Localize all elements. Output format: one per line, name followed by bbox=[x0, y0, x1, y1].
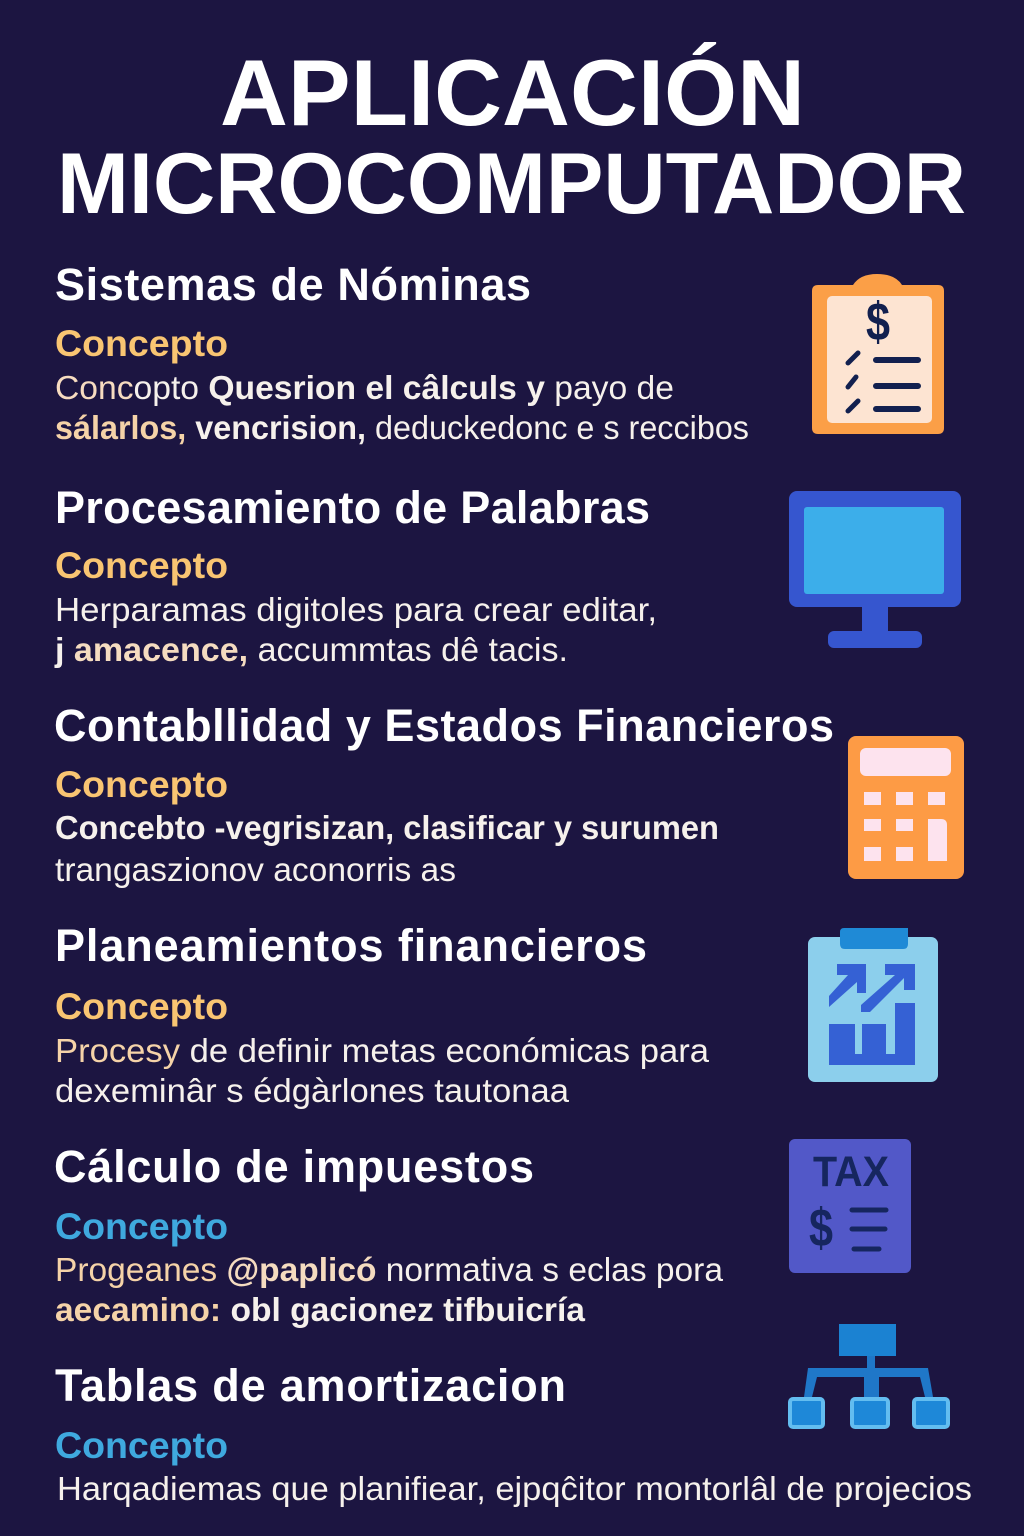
subheading: Concepto: Concepto bbox=[55, 986, 228, 1027]
panel: Planeamientos financieros bbox=[55, 920, 938, 1110]
icon: tax document: TAX bbox=[813, 1148, 889, 1196]
panel: Contabilidad y Estados Financieros bbox=[54, 700, 964, 889]
text block: contabilidad description: trangaszionov aconorris as bbox=[55, 852, 456, 889]
subheading: Concepto: Concepto bbox=[55, 545, 228, 586]
heading: Cálculo de impuestos: Cálculo de impuestos bbox=[54, 1141, 534, 1192]
text block: nóminas description bbox=[55, 370, 749, 447]
icon: payroll clipboard bbox=[812, 274, 944, 434]
icon: financial chart clipboard bbox=[808, 928, 938, 1082]
text block: planeamientos description: Procesy de definir metas económicas para bbox=[55, 1033, 709, 1070]
subheading: Concepto: Concepto bbox=[55, 323, 228, 364]
subheading: Concepto: Concepto bbox=[55, 1206, 228, 1247]
icon: hierarchy diagram bbox=[790, 1324, 948, 1427]
heading: Procesamiento de Palabras: Procesamiento de Palabras bbox=[55, 482, 650, 533]
heading: Sistemas de Nóminas: Sistemas de Nóminas bbox=[55, 259, 531, 310]
title: MICROCOMPUTADOR bbox=[57, 136, 966, 232]
text block: planeamientos description bbox=[55, 1033, 709, 1110]
icon: tax document bbox=[789, 1139, 911, 1273]
text block: nóminas description: sálarlos, vencrision, deduckedonc e s reccibos bbox=[55, 410, 749, 447]
panel: Tablas de amortizacion bbox=[55, 1324, 972, 1508]
subheading: Concepto: Concepto bbox=[55, 1425, 228, 1466]
title: APLICACIÓN bbox=[220, 40, 805, 145]
panel: Procesamiento de Palabras bbox=[54, 482, 961, 669]
heading: Contabilidad y Estados Financieros: Contabllidad y Estados Financieros bbox=[54, 700, 834, 751]
text block: planeamientos description: dexeminâr s édgàrlones tautonaa bbox=[55, 1073, 569, 1110]
icon: monitor bbox=[789, 491, 961, 648]
text block: contabilidad description: Concebto -vegrisizan, clasificar y surumen bbox=[55, 810, 719, 847]
heading: Tablas de amortizacion: Tablas de amortizacion bbox=[55, 1360, 566, 1411]
text block: impuestos description bbox=[55, 1252, 723, 1329]
panel: Cálculo de impuestos bbox=[54, 1139, 911, 1329]
text block: impuestos description: aecamino: obl gacionez tifbuicría bbox=[55, 1292, 585, 1329]
heading: Planeamientos financieros: Planeamientos financieros bbox=[55, 920, 647, 971]
panel: Sistemas de Nóminas bbox=[55, 259, 944, 447]
text block: impuestos description: Progeanes @paplicó normativa s eclas pora bbox=[55, 1252, 723, 1289]
icon: payroll clipboard: $ bbox=[866, 292, 890, 352]
title bbox=[57, 40, 966, 232]
text block: contabilidad description bbox=[55, 810, 719, 889]
text block: amortización description: Harqadiemas que planifiear, ejpqĉitor montorlâl de projecios bbox=[57, 1471, 972, 1508]
text block: nóminas description: Concopto Quesrion el câlculs y payo de bbox=[55, 370, 674, 407]
subheading: Concepto: Concepto bbox=[55, 764, 228, 805]
icon: calculator bbox=[848, 736, 964, 879]
text block: procesamiento description: Herparamas digitoles para crear editar, bbox=[55, 592, 657, 629]
text block: procesamiento description: j amacence, accummtas dê tacis. bbox=[54, 632, 568, 669]
icon: tax document: $ bbox=[809, 1198, 833, 1258]
text block: procesamiento description bbox=[54, 592, 657, 669]
